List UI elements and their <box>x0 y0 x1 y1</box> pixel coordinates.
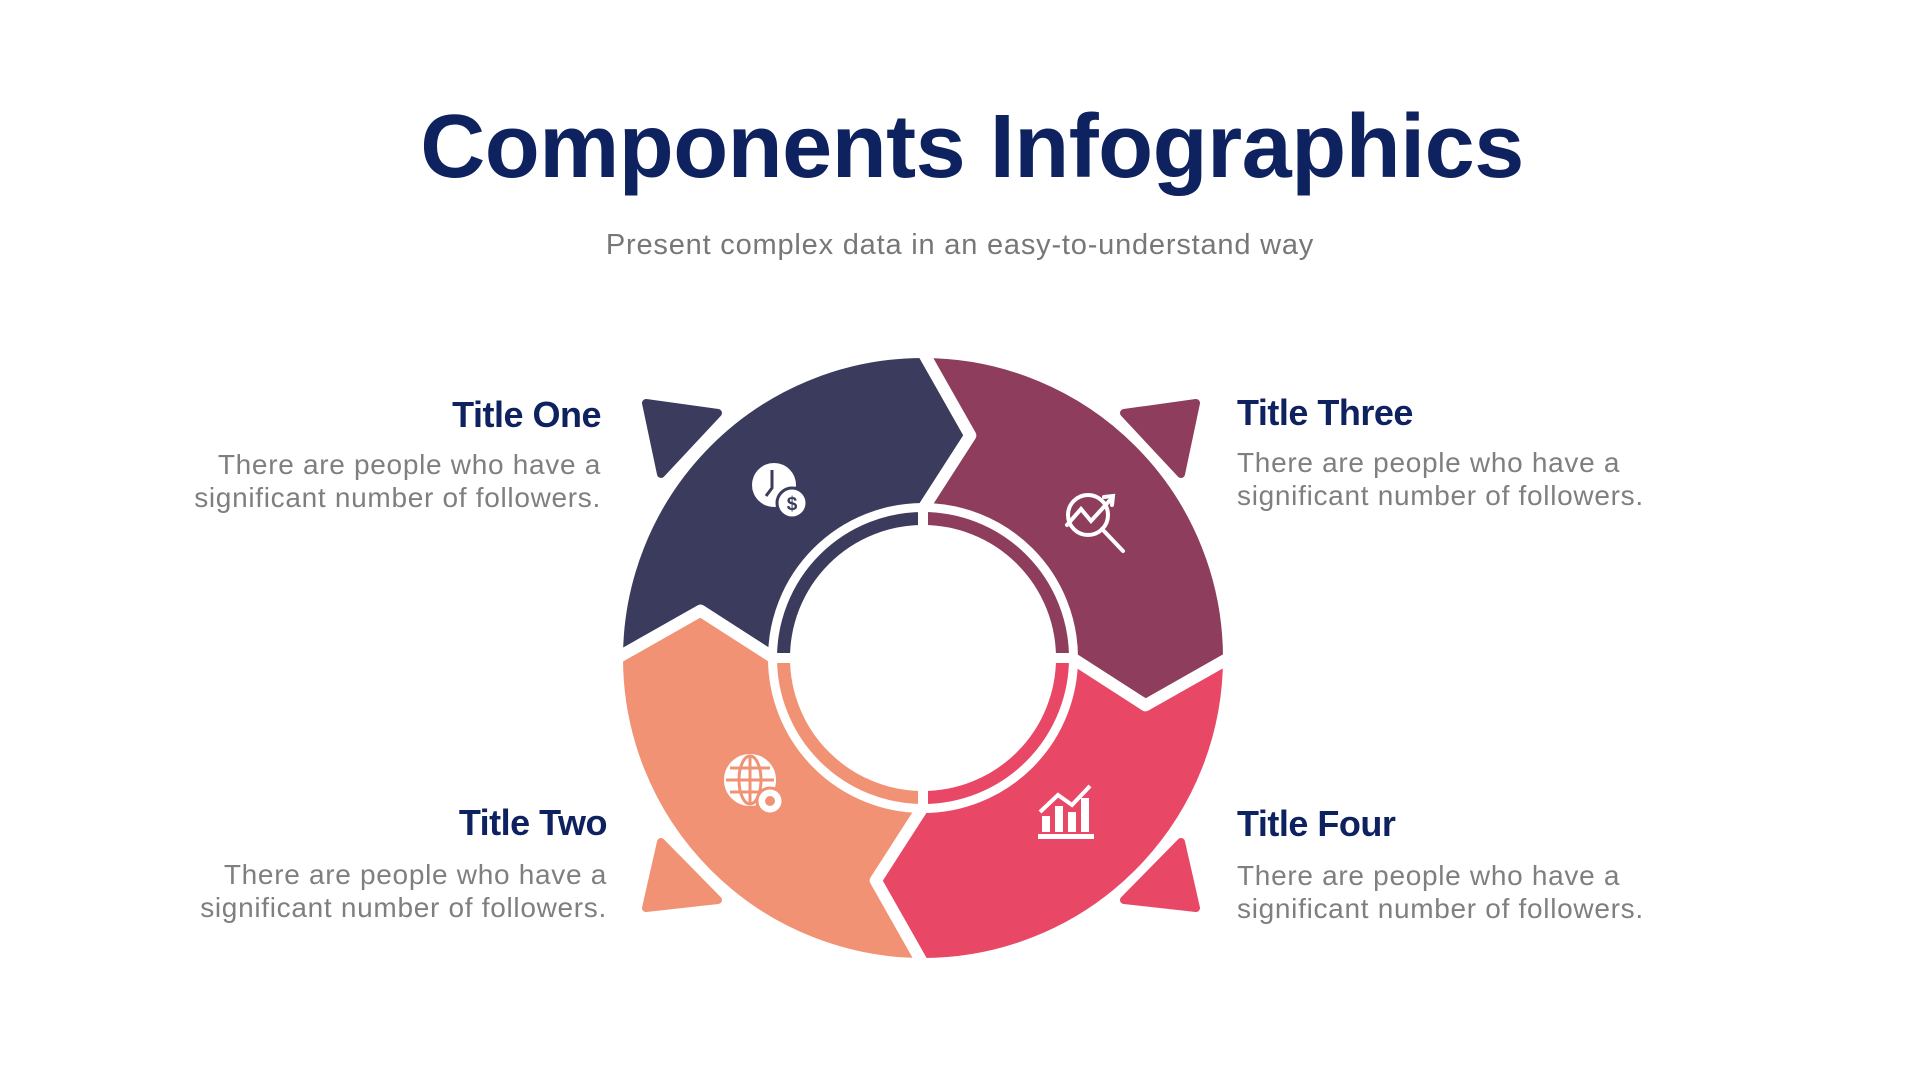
text block: Title Two: significant number of followers. <box>200 892 607 923</box>
segment: navy <box>617 352 970 658</box>
text block: Title Two: There are people who have a <box>224 859 607 890</box>
text block: Title Four: There are people who have a <box>1237 860 1620 891</box>
segment: maroon <box>923 352 1229 705</box>
text block: Title One <box>194 394 601 513</box>
text block: Title Three <box>1237 392 1644 511</box>
segment: orange <box>617 611 923 964</box>
icon: clock dollar: $ <box>787 494 798 515</box>
text block: Title Four: Title Four <box>1237 803 1395 844</box>
text block: Title One: significant number of followers. <box>194 482 601 513</box>
text block: Title Four <box>1237 803 1644 924</box>
text block: Title Two <box>200 802 607 923</box>
text block: Title Two: Title Two <box>459 802 607 843</box>
icon: bar chart <box>1038 786 1094 839</box>
text block: Title Three: Title Three <box>1237 392 1413 433</box>
text block: Title One: There are people who have a <box>218 449 601 480</box>
icon: clock dollar <box>752 463 807 518</box>
arrow tip: maroon <box>1124 403 1196 474</box>
text block: Title One: Title One <box>452 394 601 435</box>
text block: Title Three: significant number of followers. <box>1237 480 1644 511</box>
icon: globe gear <box>726 756 783 814</box>
subtitle: Present complex data in an easy-to-understand way <box>606 229 1314 261</box>
arrow tip: orange <box>646 842 718 908</box>
title: Components Infographics <box>420 97 1524 197</box>
arrow tip: red <box>1124 842 1196 908</box>
text block: Title Three: There are people who have a <box>1237 447 1620 478</box>
icon: analysis magnifier <box>1067 495 1123 551</box>
inner ring <box>784 518 1062 798</box>
text block: Title Four: significant number of followers. <box>1237 893 1644 924</box>
arrow tip: navy <box>646 403 718 474</box>
segment: red <box>876 658 1229 964</box>
